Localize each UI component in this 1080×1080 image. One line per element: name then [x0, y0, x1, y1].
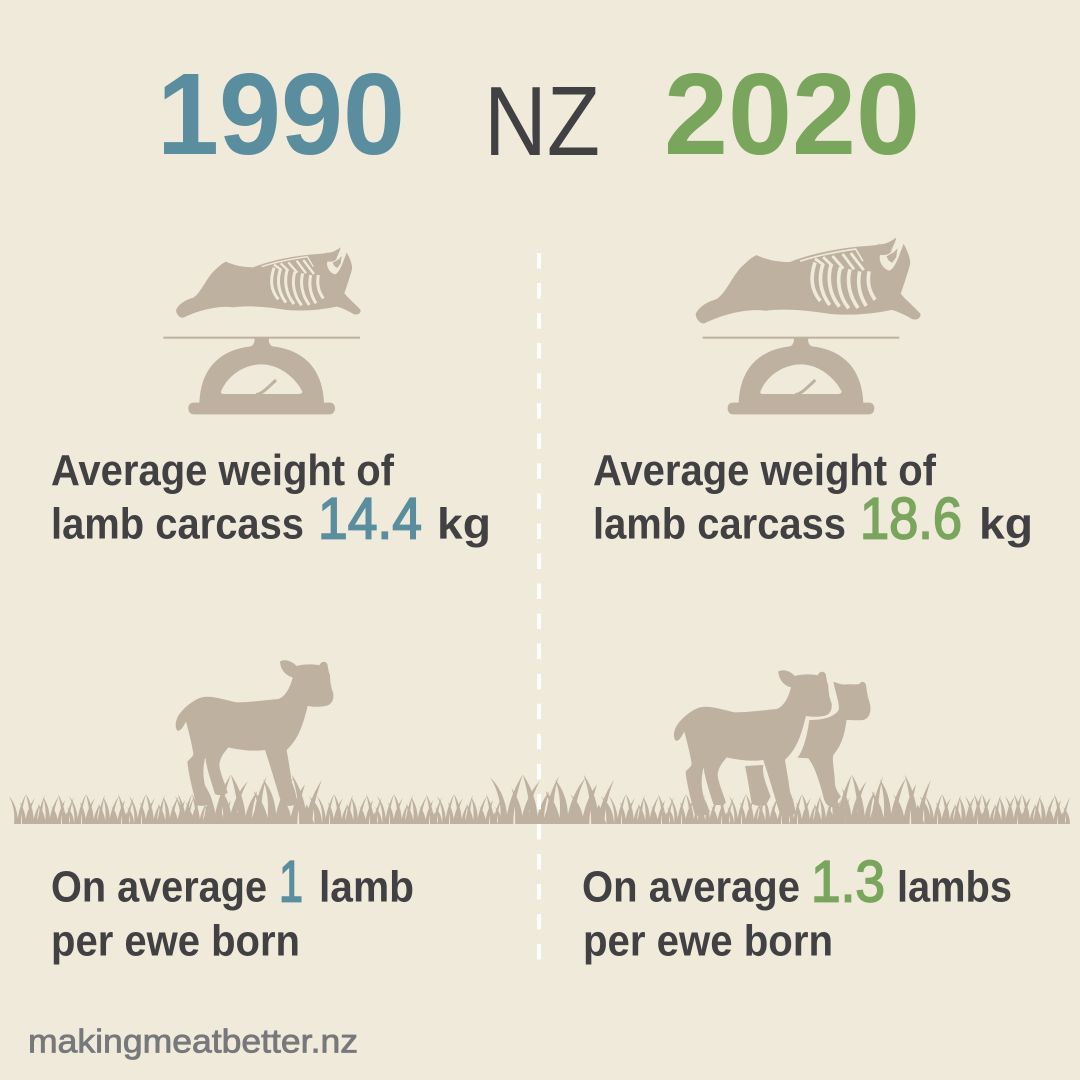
text: 1990 carcass weight: kg: [437, 500, 491, 548]
back lamb: [745, 682, 870, 807]
icon: single lamb: [176, 660, 333, 806]
year 2020: 2020: [664, 49, 920, 179]
icon: 1990 carcass on scale: [163, 247, 361, 414]
text: 2020 lambs per ewe: [582, 850, 1012, 966]
text: 1990 lambs per ewe: lamb: [319, 862, 414, 912]
text: 2020 carcass weight: Average weight of: [593, 446, 936, 495]
value: 14.4: 14.4: [318, 486, 422, 552]
value: 1.3: 1.3: [811, 850, 885, 914]
title: [157, 49, 920, 179]
text: 1990 lambs per ewe: [51, 850, 414, 966]
text: 2020 carcass weight: lamb carcass: [593, 500, 846, 548]
text: 1990 carcass weight: Average weight of: [51, 446, 394, 495]
year 1990: 1990: [157, 49, 405, 179]
text: 1990 carcass weight: lamb carcass: [51, 500, 304, 548]
text: 1990 carcass weight: [51, 446, 491, 552]
text: 2020 carcass weight: [593, 446, 1033, 552]
text: 2020 carcass weight: kg: [979, 500, 1033, 548]
NZ: NZ: [484, 66, 600, 176]
text: 2020 lambs per ewe: lambs: [897, 862, 1012, 912]
text: 2020 lambs per ewe: per ewe born: [583, 916, 833, 966]
text: 2020 lambs per ewe: On average: [582, 862, 800, 912]
icon: 2020 carcass on scale: [696, 238, 921, 414]
footer url: makingmeatbetter.nz: [28, 1022, 358, 1060]
front lamb: [674, 670, 832, 816]
icon: two lambs: [674, 670, 870, 816]
grass strip: [9, 774, 1070, 824]
value: 1: 1: [279, 850, 303, 914]
value: 18.6: 18.6: [860, 486, 962, 552]
text: 1990 lambs per ewe: On average: [51, 862, 267, 912]
text: 1990 lambs per ewe: per ewe born: [51, 916, 300, 966]
